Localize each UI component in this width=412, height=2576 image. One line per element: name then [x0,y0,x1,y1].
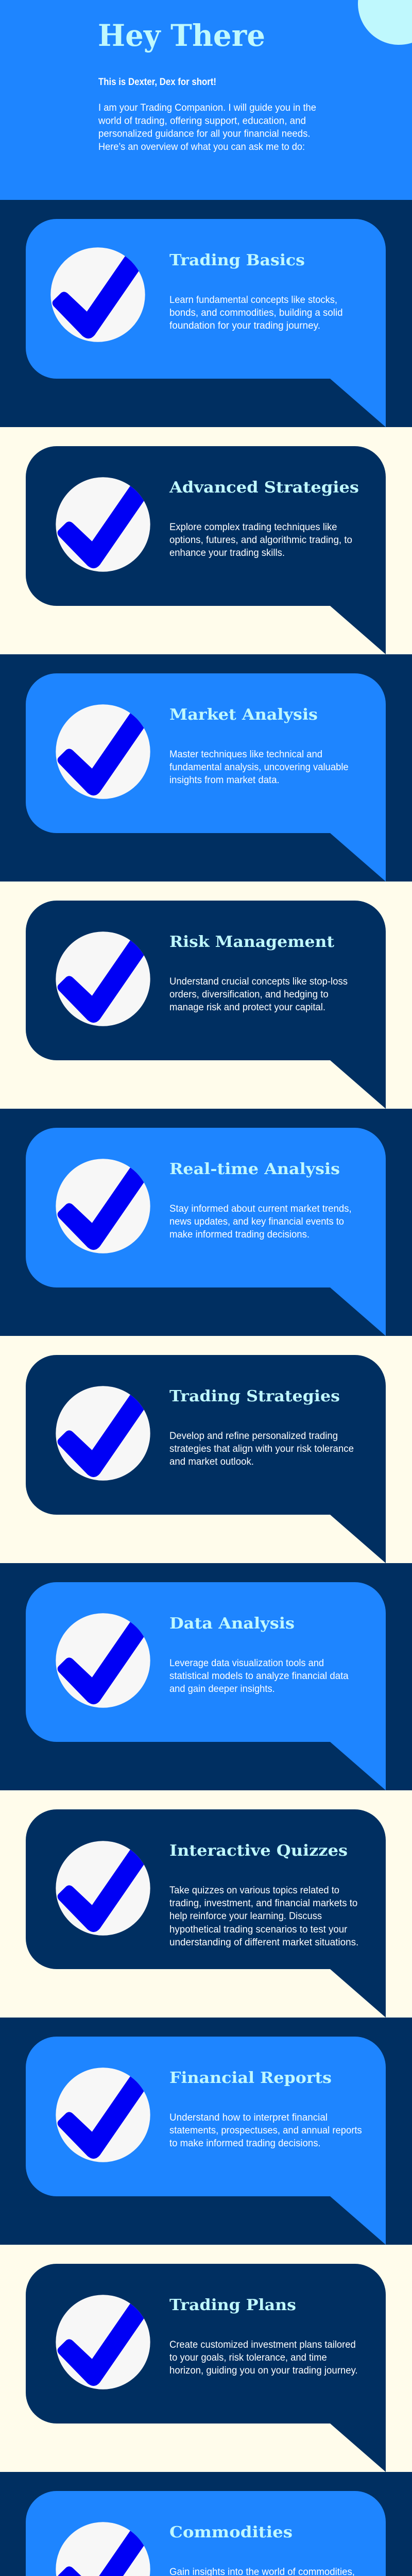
heading: Risk Management [169,933,334,951]
intro paragraph: world of trading, offering support, education, and [98,115,306,127]
icon: check mark [56,477,150,572]
description: statistical models to analyze financial data [169,1671,349,1682]
icon: check mark [56,704,150,799]
heading: Data Analysis [169,1615,295,1633]
description [169,295,343,331]
speech bubble [26,673,386,882]
icon: check mark [56,1613,150,1708]
description: Take quizzes on various topics related to [169,1885,339,1896]
intro paragraph: Here’s an overview of what you can ask me to do: [98,142,305,152]
description: Learn fundamental concepts like stocks, [169,295,337,306]
decorative circle: header top right [358,0,412,45]
speech bubble [26,901,386,1109]
description: hypothetical trading scenarios to test your [169,1924,348,1935]
icon: check mark [50,247,145,342]
panel: Commodities [0,2472,412,2576]
panel: Advanced Strategies [26,446,386,654]
description [169,1431,354,1467]
description: understanding of different market situations. [169,1937,358,1948]
description: strategies that align with your risk tolerance [169,1444,354,1454]
panel: Trading Plans [26,2264,386,2472]
description: foundation for your trading journey. [169,320,320,331]
description: horizon, guiding you on your trading journey. [169,2365,358,2376]
description: manage risk and protect your capital. [169,1002,325,1013]
description: insights from market data. [169,775,280,786]
panel: Trading Strategies [26,1355,386,1563]
panel: Risk Management [26,901,386,1109]
description: Develop and refine personalized trading [169,1431,338,1442]
description: Understand how to interpret financial [169,2112,328,2123]
description: enhance your trading skills. [169,548,285,558]
description [169,1658,349,1694]
speech bubble [26,1582,386,1790]
description: help reinforce your learning. Discuss [169,1911,322,1922]
speech bubble [26,1355,386,1563]
intro paragraph: personalized guidance for all your financial needs. [98,129,310,139]
description: to your goals, risk tolerance, and time [169,2352,327,2363]
description: orders, diversification, and hedging to [169,989,329,1000]
speech bubble [26,2491,386,2576]
icon: check mark [56,2522,150,2576]
icon: check mark [56,1159,150,1253]
heading: Trading Plans [169,2296,296,2314]
icon: check mark [56,2067,150,2162]
heading: Commodities [169,2523,293,2541]
description [169,1204,352,1240]
description [169,976,348,1013]
icon: check mark [56,931,150,1026]
description [169,2112,362,2149]
description: and market outlook. [169,1456,254,1467]
description [169,522,352,558]
speech bubble [26,446,386,654]
speech bubble [26,1128,386,1336]
panel: Interactive Quizzes [26,1809,386,2018]
description: Create customized investment plans tailored [169,2340,356,2350]
intro paragraph: I am your Trading Companion. I will guide you in the [98,103,316,113]
panel: Data Analysis [0,1563,412,1790]
description [169,749,349,786]
description: and gain deeper insights. [169,1684,275,1694]
description: Explore complex trading techniques like [169,522,337,533]
panel: Trading Basics [0,200,412,427]
description: make informed trading decisions. [169,1229,310,1240]
speech bubble [26,2264,386,2472]
header panel [0,0,412,200]
title: Hey There: Hey There [98,18,265,53]
description [169,1885,358,1948]
heading: Interactive Quizzes [169,1842,348,1860]
description: news updates, and key financial events to [169,1216,344,1227]
panel: Market Analysis [0,654,412,882]
description: Stay informed about current market trends, [169,1204,352,1214]
description: Understand crucial concepts like stop-loss [169,976,348,987]
heading: Market Analysis [169,706,318,724]
description: bonds, and commodities, building a solid [169,308,343,318]
description: Leverage data visualization tools and [169,1658,324,1669]
panel: Financial Reports [0,2018,412,2245]
heading: Trading Basics [169,251,305,269]
description: to make informed trading decisions. [169,2138,321,2149]
speech bubble [26,1809,386,2018]
heading: Real-time Analysis [169,1160,340,1178]
speech bubble [26,2037,386,2245]
description: options, futures, and algorithmic trading, to [169,535,352,546]
description: fundamental analysis, uncovering valuable [169,762,349,773]
intro paragraph [98,103,316,152]
icon: check mark [56,2295,150,2389]
panel: Real-time Analysis [0,1109,412,1336]
icon: check mark [56,1386,150,1481]
icon: check mark [56,1841,150,1936]
heading: Financial Reports [169,2069,332,2087]
speech bubble [26,219,386,427]
heading: Advanced Strategies [169,479,359,497]
heading: Trading Strategies [169,1387,340,1405]
description [169,2340,358,2376]
description: statements, prospectuses, and annual reports [169,2125,362,2136]
intro bold line: This is Dexter, Dex for short! [98,77,216,88]
description: trading, investment, and financial markets to [169,1898,357,1909]
description: Master techniques like technical and [169,749,322,760]
